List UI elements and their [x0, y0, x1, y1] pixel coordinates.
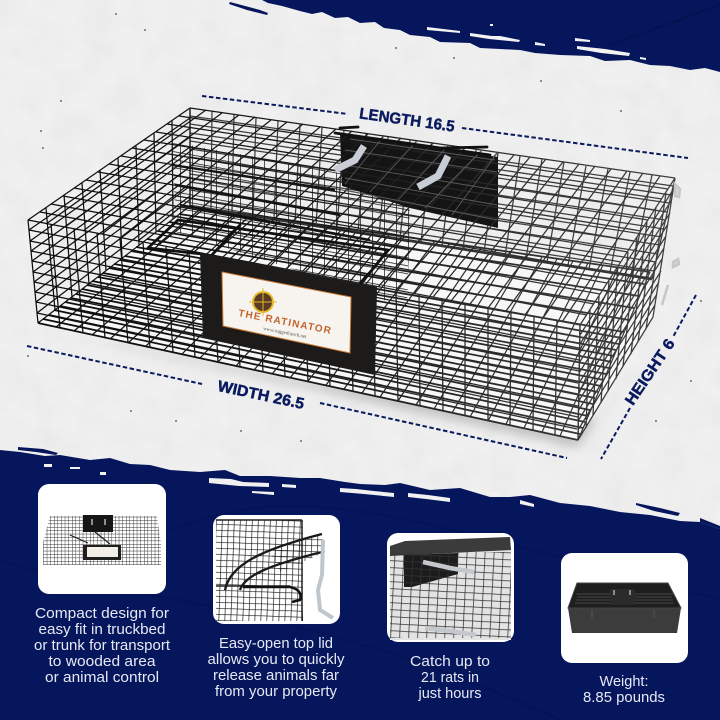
card image — [561, 553, 688, 663]
feature 4: weight — [561, 553, 688, 706]
top lid mesh — [28, 108, 675, 325]
card image — [387, 533, 514, 642]
caption: easy fit in truckbed — [38, 622, 166, 638]
cage shadow — [45, 330, 640, 448]
feature 3: catch rats — [387, 533, 514, 702]
caption: Weight: — [600, 674, 648, 690]
side clips — [662, 184, 680, 305]
caption: Compact design for — [35, 606, 169, 622]
floor mesh — [38, 206, 650, 440]
website: www.ruggedranch.net — [263, 327, 307, 340]
caption — [583, 674, 665, 706]
wire cage trap — [28, 108, 680, 448]
door label plate — [200, 253, 377, 375]
dimension: height — [601, 295, 696, 459]
feature 2: easy-open lid — [208, 515, 345, 700]
ratinator logo — [249, 288, 277, 316]
caption: Easy-open top lid — [219, 636, 333, 652]
back wall mesh — [190, 108, 675, 279]
brand name: THE RATINATOR — [237, 308, 332, 337]
caption: 21 rats in — [421, 670, 479, 686]
navy corner band top right — [229, 0, 720, 72]
caption: or trunk for transport — [34, 638, 170, 654]
dimension: length — [202, 96, 688, 158]
caption: just hours — [417, 686, 482, 702]
spring latch handles — [335, 146, 448, 187]
card image — [38, 484, 166, 594]
inner funnel mesh box — [172, 142, 410, 310]
caption: 8.85 pounds — [583, 690, 665, 706]
caption: from your property — [215, 684, 338, 700]
cage interior floor glow — [38, 206, 653, 440]
card image — [213, 515, 340, 624]
navy lower panel — [0, 447, 720, 720]
grey wires over panel — [344, 136, 498, 220]
front wall mesh — [28, 220, 580, 440]
dimension: width — [27, 346, 567, 458]
caption: allows you to quickly — [208, 652, 345, 668]
caption — [208, 636, 345, 700]
feature 1: compact design — [34, 484, 170, 686]
caption: or animal control — [45, 670, 159, 686]
caption: to wooded area — [48, 654, 156, 670]
caption — [34, 606, 170, 686]
dimension: length: LENGTH 16.5 — [358, 105, 456, 136]
caption: release animals far — [213, 668, 339, 684]
back floor heavy line — [190, 206, 652, 279]
caption: Catch up to — [410, 654, 490, 670]
right wall mesh — [578, 178, 675, 440]
caption — [410, 654, 490, 702]
dimension: width: WIDTH 26.5 — [216, 378, 306, 413]
dimension: height: HEIGHT 6 — [622, 336, 679, 409]
left wall mesh — [29, 108, 190, 313]
black back panel — [340, 133, 498, 228]
lid frame bars — [148, 127, 490, 285]
